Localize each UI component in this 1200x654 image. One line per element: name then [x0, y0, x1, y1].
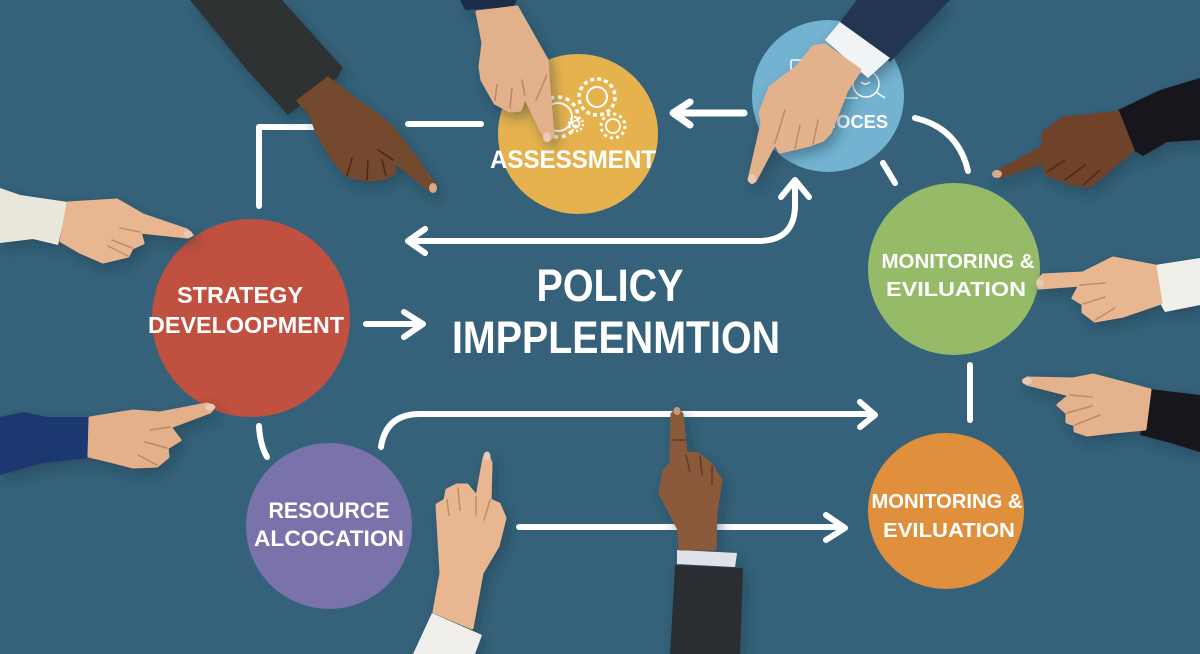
icon: monitor	[791, 60, 815, 76]
icon: face and stand	[845, 71, 885, 98]
hand: right middle white cuff	[1036, 258, 1200, 321]
node: strategy development: STRATEGY	[177, 282, 303, 308]
arrow: strategy to title	[366, 312, 423, 337]
title	[452, 260, 780, 363]
arrow: long two-way arrow	[408, 180, 809, 253]
node: assessment	[490, 54, 658, 214]
node: monitoring and evaluation, orange	[868, 433, 1024, 589]
connector: strategy to resource	[259, 426, 267, 457]
connector: monitoring to orange node	[967, 365, 973, 420]
connector: dash to assessment	[408, 121, 481, 127]
arrow: resource to monitoring, upper	[381, 402, 875, 447]
connector: short dash to monitoring	[883, 163, 895, 183]
node: strategy development	[148, 219, 350, 417]
node: resource allocation	[246, 443, 412, 609]
node: choices: DIOCES	[818, 112, 888, 132]
node: resource allocation: RESOURCE	[268, 498, 390, 523]
connector: arc to monitoring	[915, 118, 968, 171]
node: monitoring and evaluation, orange: MONITORING &	[872, 491, 1022, 513]
hand: left lower navy sleeve	[0, 404, 215, 475]
node: strategy development: DEVELOOPMENT	[148, 312, 344, 338]
hand: right lower black sleeve	[1022, 375, 1200, 452]
hand: left upper white cuff	[0, 188, 192, 262]
node: monitoring and evaluation, green	[868, 183, 1040, 355]
hand: bottom left white cuff	[413, 452, 505, 654]
title: POLICY	[536, 260, 684, 311]
node: monitoring and evaluation, orange: EVILUATION	[883, 520, 1015, 542]
node: choices	[752, 20, 904, 172]
hand: top-left dark sleeve	[190, 0, 437, 193]
node: resource allocation: ALCOCATION	[254, 526, 404, 551]
title: IMPPLEENMTION	[452, 312, 780, 363]
node: monitoring and evaluation, green: MONITORING &	[882, 251, 1034, 273]
hand: top centre	[460, 0, 553, 142]
node: assessment: ASSESSMENT	[490, 146, 656, 174]
icon: gears	[538, 79, 625, 138]
node: monitoring and evaluation, green: EVILUATION	[886, 279, 1026, 301]
hand: bottom centre dark sleeve	[660, 407, 743, 654]
connector: top-left elbow	[259, 127, 317, 206]
hand: top-right navy sleeve	[748, 0, 950, 184]
arrow: resource to monitoring, lower	[519, 515, 845, 540]
hand: right top black sleeve	[992, 78, 1200, 186]
arrow: choices to assessment	[673, 102, 744, 125]
